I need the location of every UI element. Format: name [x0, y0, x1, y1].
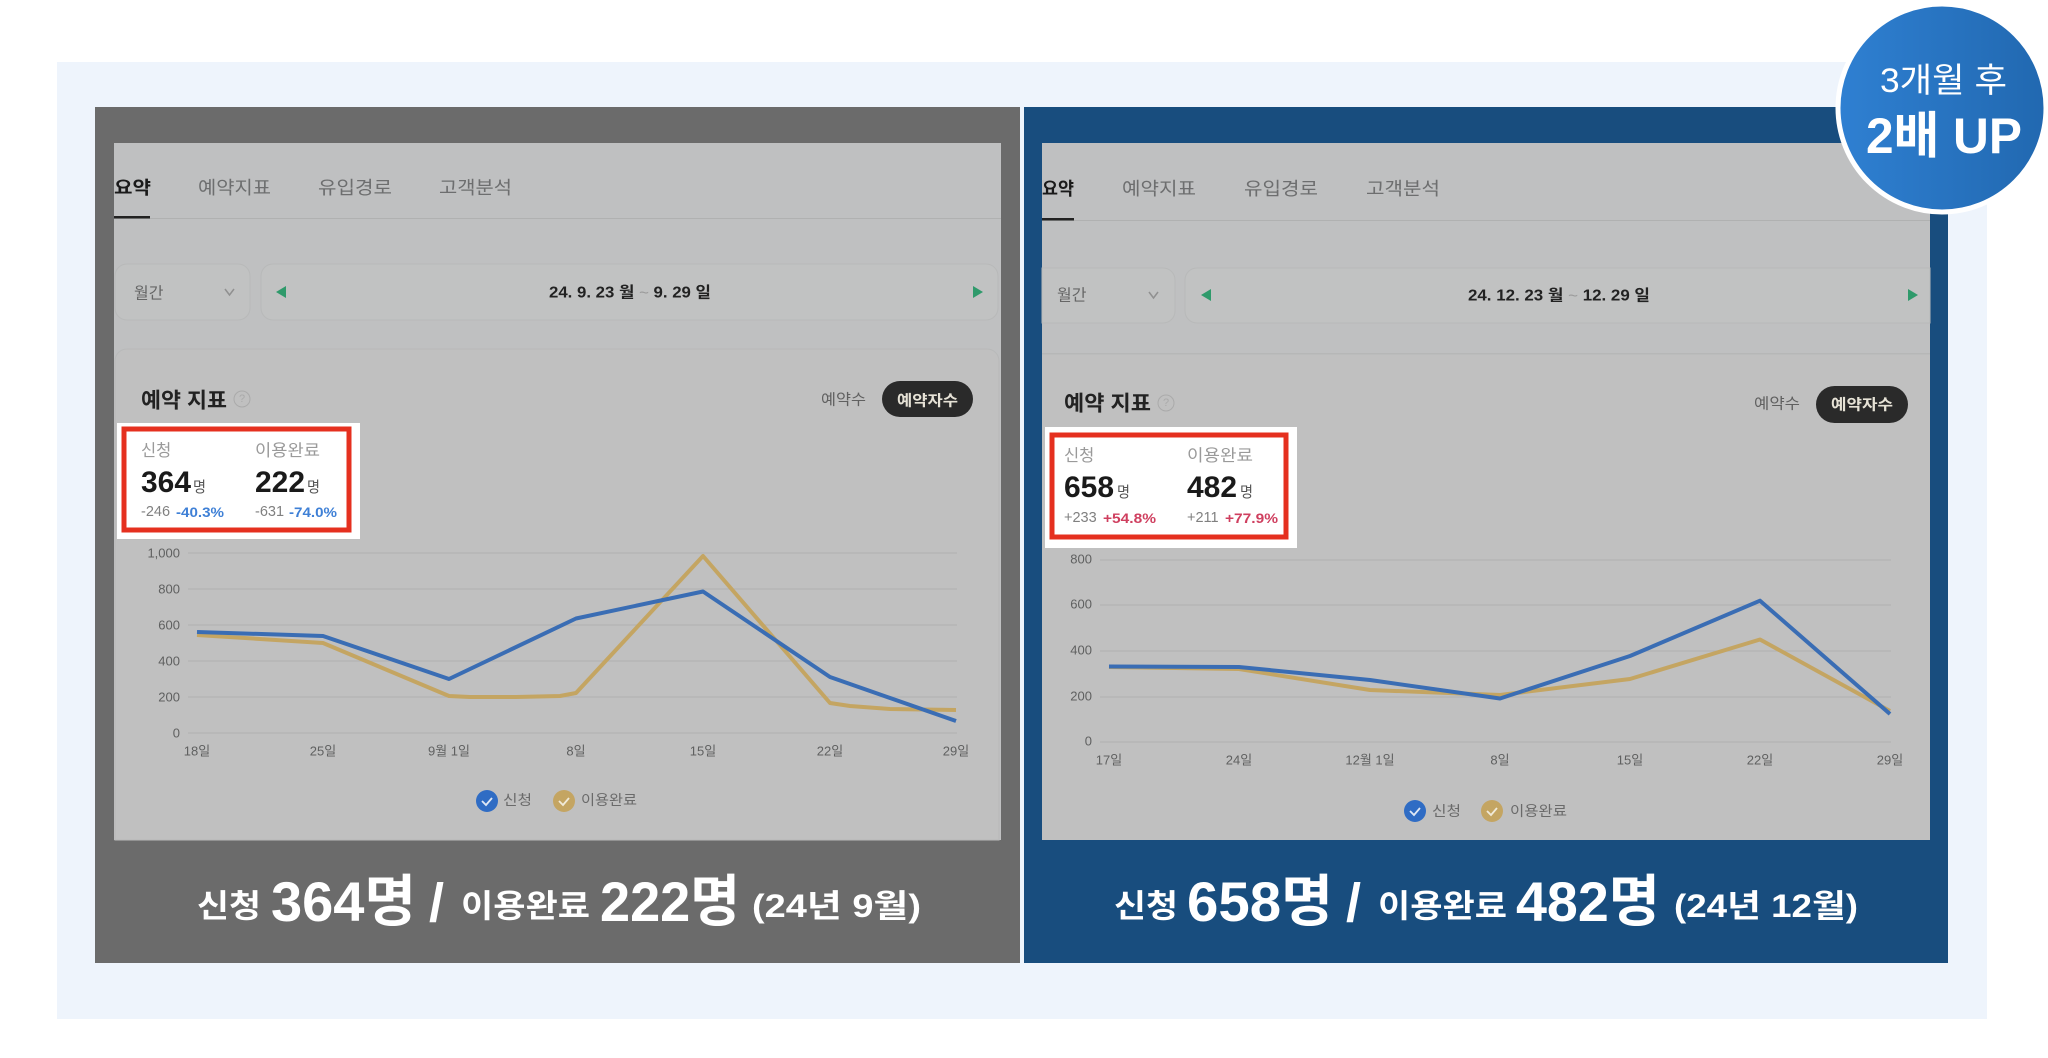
toggle	[821, 381, 973, 417]
highlighted stats box: 658	[1064, 471, 1114, 504]
period select	[115, 264, 250, 320]
highlighted stats box: -74.0%	[289, 504, 338, 520]
line chart: December: 17일	[1096, 752, 1122, 768]
chart legend: 신청	[503, 792, 532, 808]
caption: September: /	[429, 873, 444, 933]
highlighted stats box: 명	[1117, 484, 1130, 501]
line chart: December: 12월 1일	[1345, 752, 1395, 768]
highlighted stats box	[1045, 427, 1297, 548]
highlighted stats box: +54.8%	[1103, 510, 1157, 526]
card title: 예약 지표	[1064, 392, 1151, 416]
highlighted stats box: 이용완료	[1187, 446, 1253, 465]
tab bar: 고객분석	[1366, 179, 1440, 199]
period select: 월간	[1057, 286, 1087, 304]
help icon: ?	[239, 393, 245, 405]
caption: December	[1114, 870, 1858, 933]
highlighted stats box: 364	[141, 466, 191, 499]
highlighted stats box: 222	[255, 466, 305, 499]
tab bar: 예약지표	[198, 178, 271, 198]
chart legend: 이용완료	[1510, 803, 1567, 819]
line chart: September: 400	[158, 654, 180, 668]
toggle	[1754, 386, 1908, 423]
date range selector	[261, 264, 998, 320]
highlighted stats box: 명	[1240, 484, 1253, 501]
line chart: September: 1,000	[147, 546, 180, 560]
line chart: September: 200	[158, 690, 180, 704]
panel: after (December 2024)	[1024, 107, 1948, 963]
badge: 3 months later, 2x up	[1838, 4, 2046, 212]
caption: December: 신청	[1114, 888, 1178, 924]
line chart: September: 600	[158, 618, 180, 632]
badge: 3 months later, 2x up: 2배 UP	[1866, 108, 2022, 164]
card: reservation metrics	[1042, 353, 1930, 840]
line chart: September	[147, 546, 969, 758]
tab bar: 고객분석	[439, 178, 512, 198]
highlighted stats box: -40.3%	[176, 504, 225, 520]
badge: 3 months later, 2x up: 3개월 후	[1880, 62, 2007, 100]
line chart: December: 15일	[1617, 752, 1643, 768]
chart legend: 이용완료	[581, 792, 637, 808]
chart legend	[476, 790, 637, 812]
date range selector	[1185, 268, 1930, 323]
line chart: December: 29일	[1877, 752, 1903, 768]
help icon	[234, 391, 250, 407]
line chart: September: 0	[173, 726, 180, 740]
highlighted stats box: 482	[1187, 471, 1237, 504]
caption: September: 신청	[197, 888, 261, 924]
line chart: December: 600	[1070, 596, 1092, 612]
toggle: 예약수	[821, 392, 866, 408]
line chart: December: 22일	[1747, 752, 1773, 768]
caption: December: (24년 12월)	[1674, 888, 1858, 924]
toggle: 예약수	[1754, 396, 1800, 412]
highlighted stats box: 명	[193, 479, 206, 496]
caption: September: 222명	[600, 870, 740, 933]
tab bar	[1042, 179, 1930, 221]
line chart: December: 24일	[1226, 752, 1252, 768]
chart legend: 신청	[1432, 803, 1461, 819]
line chart: December: 400	[1070, 642, 1092, 658]
tab bar: 요약	[1042, 179, 1074, 199]
card title: 예약 지표	[141, 390, 227, 412]
caption: December: /	[1346, 873, 1361, 933]
line chart: September: 15일	[690, 744, 716, 758]
highlighted stats box: +77.9%	[1225, 510, 1279, 526]
help icon	[1158, 395, 1174, 411]
highlighted stats box	[117, 423, 360, 539]
period select	[1042, 268, 1175, 323]
highlighted stats box: 명	[307, 479, 320, 496]
caption: September: 364명	[271, 870, 416, 933]
caption: December: 658명	[1187, 870, 1333, 933]
highlighted stats box: 이용완료	[255, 441, 320, 460]
tab bar: 요약	[114, 178, 151, 198]
panel: before (September 2024)	[95, 107, 1020, 963]
line chart: December: 8일	[1490, 752, 1510, 768]
date range selector: 24. 9. 23 월 ~ 9. 29 일	[549, 284, 711, 302]
line chart: December	[1070, 552, 1903, 768]
tab bar: 유입경로	[1244, 179, 1318, 199]
tab bar	[114, 178, 1001, 219]
dashboard screenshot: December	[1042, 143, 1930, 840]
line chart: September: 9월 1일	[428, 744, 470, 758]
help icon: ?	[1163, 397, 1169, 409]
highlighted stats box: +211	[1187, 510, 1219, 526]
line chart: December: 200	[1070, 688, 1092, 704]
toggle: 예약자수	[1831, 396, 1893, 414]
highlighted stats box: -631	[255, 504, 284, 520]
caption: December: 이용완료	[1378, 888, 1507, 924]
date range selector: 24. 12. 23 월 ~ 12. 29 일	[1468, 286, 1650, 304]
caption: September: 이용완료	[461, 888, 590, 924]
line chart: September: 25일	[310, 744, 336, 758]
line chart: December: 0	[1085, 734, 1092, 748]
caption: December: 482명	[1516, 870, 1660, 933]
period select: 월간	[134, 284, 164, 302]
tab bar: 예약지표	[1122, 179, 1196, 199]
highlighted stats box: 신청	[141, 441, 171, 460]
caption: September: (24년 9월)	[752, 888, 921, 924]
toggle: 예약자수	[897, 392, 958, 410]
highlighted stats box: +233	[1064, 510, 1097, 526]
highlighted stats box: 신청	[1064, 446, 1094, 465]
highlighted stats box: -246	[141, 504, 170, 520]
line chart: September: 22일	[817, 744, 843, 758]
tab bar: 유입경로	[318, 178, 392, 198]
chart legend	[1404, 800, 1567, 822]
line chart: December: 800	[1070, 552, 1092, 566]
dashboard screenshot: September	[114, 143, 1001, 840]
card: reservation metrics	[115, 349, 999, 840]
line chart: September: 29일	[943, 744, 969, 758]
line chart: September: 800	[158, 582, 180, 596]
line chart: September: 18일	[184, 744, 210, 758]
line chart: September: 8일	[566, 744, 586, 758]
caption: September	[197, 870, 921, 933]
